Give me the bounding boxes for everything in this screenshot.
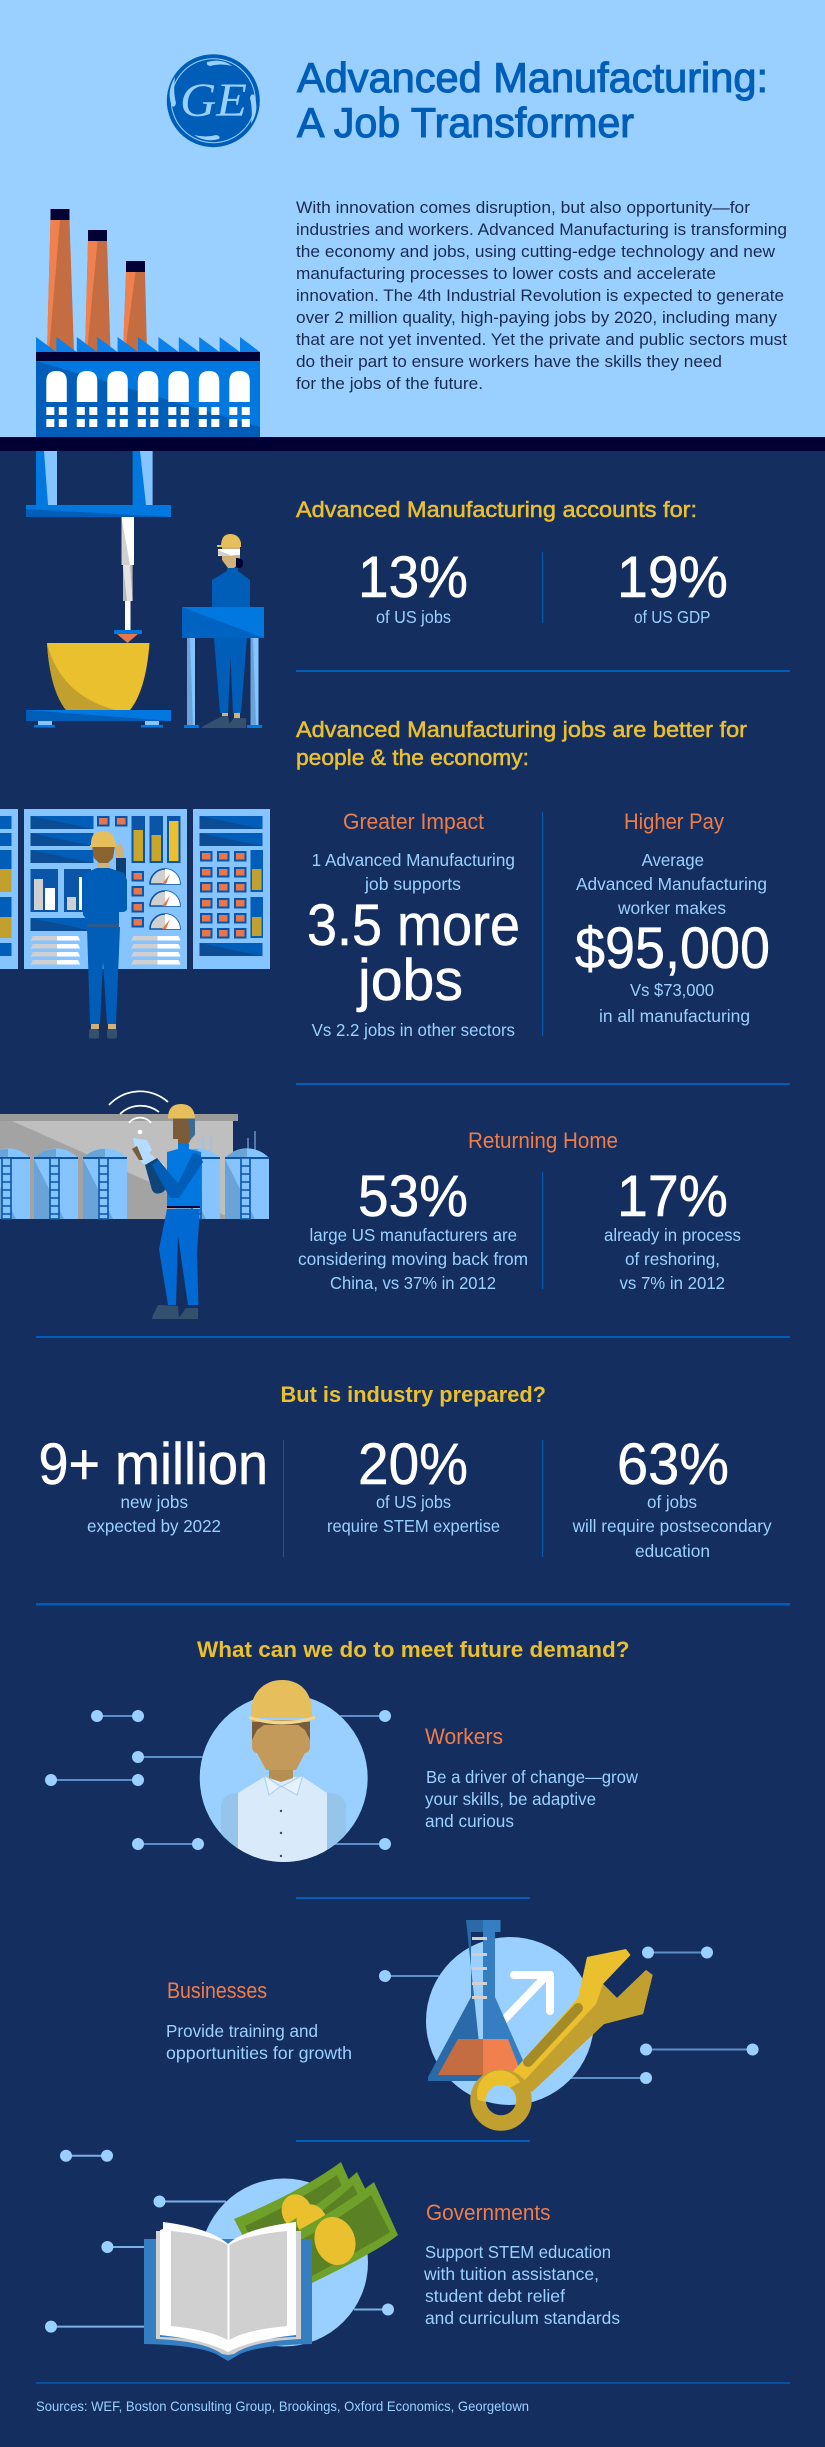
intro text block — [296, 199, 787, 393]
column: higher pay — [575, 809, 770, 1026]
stat: 63%: of jobs — [647, 1492, 697, 1512]
column: higher pay: Higher Pay — [624, 809, 724, 834]
text block: governments: with tuition assistance, — [423, 2264, 599, 2284]
text block: governments: Support STEM education — [425, 2242, 611, 2262]
stat: 20%: of US jobs — [376, 1492, 451, 1512]
column: higher pay: Advanced Manufacturing — [576, 874, 767, 894]
stat: 19% of US GDP: 19% — [617, 545, 728, 610]
column: higher pay: in all manufacturing — [599, 1006, 750, 1026]
heading: future demand: What can we do to meet future demand? — [197, 1637, 630, 1662]
intro text block: the economy and jobs, using cutting-edge technology and new — [296, 243, 775, 261]
stat: 9+ million: new jobs — [120, 1492, 188, 1512]
stat: 20%: require STEM expertise — [327, 1516, 500, 1536]
icon: factory building with silos — [0, 1114, 269, 1219]
heading: jobs are better — [296, 717, 747, 770]
stat: 17% reshoring: 17% — [617, 1164, 728, 1229]
stat: 13% of US jobs: of US jobs — [376, 607, 451, 627]
stat: 63% — [572, 1432, 772, 1561]
column: greater impact: 1 Advanced Manufacturing — [312, 850, 515, 870]
column: greater impact: jobs — [356, 948, 463, 1013]
intro text block: innovation. The 4th Industrial Revolution is expected to generate — [296, 287, 784, 305]
column: greater impact: Vs 2.2 jobs in other sectors — [312, 1020, 515, 1040]
stat: 53% moving back — [298, 1164, 528, 1293]
text block: governments: and curriculum standards — [425, 2308, 620, 2328]
stat: 63%: will require postsecondary — [572, 1516, 772, 1536]
text block: governments: Governments — [426, 2200, 550, 2225]
stat: 9+ million: expected by 2022 — [87, 1516, 221, 1536]
stat: 17% reshoring: vs 7% in 2012 — [620, 1273, 725, 1293]
text block: businesses — [166, 1978, 352, 2063]
text block: workers: Workers — [425, 1724, 503, 1749]
stat: 19% of US GDP: of US GDP — [634, 607, 710, 627]
icon: control panels — [0, 809, 270, 969]
column: greater impact: 3.5 more — [307, 893, 520, 958]
intro text block: over 2 million quality, high-paying jobs by 2020, including many — [296, 309, 778, 327]
stat: 9+ million — [38, 1432, 268, 1536]
dark band — [0, 437, 825, 451]
column: higher pay: Average — [642, 850, 704, 870]
stat: 17% reshoring: of reshoring, — [625, 1249, 720, 1269]
icon: worker portrait with connectors — [45, 1680, 391, 1862]
title: Advanced Manufacturing: — [297, 54, 768, 101]
stat: 17% reshoring — [604, 1164, 741, 1293]
icon: press machine — [26, 451, 171, 728]
stat: 53% moving back: 53% — [358, 1164, 468, 1229]
text block: workers: and curious — [425, 1811, 514, 1831]
column: greater impact — [307, 809, 520, 1040]
heading: accounts for: Advanced Manufacturing accounts for: — [296, 497, 697, 522]
stat: 17% reshoring: already in process — [604, 1225, 741, 1245]
icon: GE logo — [167, 54, 260, 147]
heading: jobs are better: Advanced Manufacturing jobs are better for — [296, 717, 747, 742]
text block: workers: your skills, be adaptive — [425, 1789, 596, 1809]
text block: businesses: opportunities for growth — [166, 2043, 352, 2063]
icon: flask and wrench with connectors — [379, 1920, 759, 2123]
stat: 9+ million: 9+ million — [38, 1432, 268, 1497]
stat: 63%: 63% — [617, 1432, 729, 1497]
stat: 20%: 20% — [358, 1432, 468, 1497]
icon: worker at console — [182, 534, 264, 728]
stat: 63%: education — [635, 1541, 710, 1561]
column: greater impact: Greater Impact — [343, 809, 484, 834]
column: higher pay: worker makes — [617, 898, 726, 918]
icon: factory — [36, 209, 260, 437]
intro text block: With innovation comes disruption, but also opportunity—for — [296, 199, 751, 217]
intro text block: that are not yet invented. Yet the private and public sectors must — [296, 331, 787, 349]
header background — [0, 0, 825, 437]
heading: but is industry prepared: But is industry prepared? — [280, 1382, 546, 1407]
stat: 53% moving back: large US manufacturers are — [310, 1225, 517, 1245]
text block: workers: Be a driver of change—grow — [426, 1767, 638, 1787]
column: greater impact: job supports — [364, 874, 461, 894]
text block: workers — [425, 1724, 638, 1831]
icon: book and money with connectors — [45, 2150, 398, 2361]
intro text block: do their part to ensure workers have the skills they need — [296, 353, 722, 371]
intro text block: industries and workers. Advanced Manufacturing is transforming — [296, 221, 787, 239]
icon: GE logo: GE — [180, 74, 247, 127]
intro text block: manufacturing processes to lower costs and accelerate — [296, 265, 716, 283]
heading: jobs are better: people & the economy: — [296, 745, 529, 770]
column: higher pay: $95,000 — [575, 916, 770, 981]
title — [297, 54, 768, 146]
stat: 20% — [327, 1432, 500, 1536]
icon: worker with tablet and wifi — [109, 1091, 203, 1319]
intro text block: for the jobs of the future. — [296, 375, 483, 393]
stat: 53% moving back: considering moving back from — [298, 1249, 528, 1269]
stat: 13% of US jobs: 13% — [358, 545, 468, 610]
heading: returning home: Returning Home — [468, 1128, 618, 1153]
column: higher pay: Vs $73,000 — [630, 980, 714, 1000]
text block: businesses: Provide training and — [166, 2021, 318, 2041]
title: A Job Transformer — [297, 99, 634, 146]
sources: Sources: WEF, Boston Consulting Group, Brookings, Oxford Economics, Georgetown — [36, 2398, 529, 2414]
icon: worker at panels — [82, 831, 127, 1038]
text block: businesses: Businesses — [167, 1978, 267, 2003]
stat: 53% moving back: China, vs 37% in 2012 — [330, 1273, 496, 1293]
text block: governments — [423, 2200, 620, 2328]
text block: governments: student debt relief — [425, 2286, 565, 2306]
